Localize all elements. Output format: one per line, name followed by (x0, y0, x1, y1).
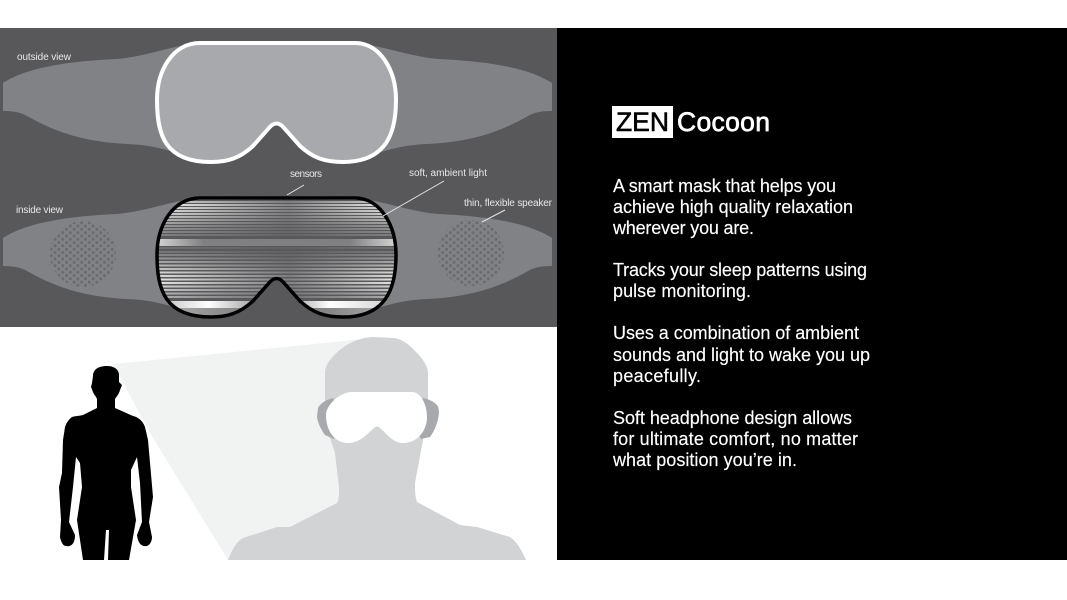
text block: intro: wherever you are. (612, 218, 754, 238)
leader line: speaker (482, 210, 505, 222)
text block: waking (613, 323, 870, 386)
inside mask strap (3, 200, 552, 310)
inside mask lens with sensor stripes (158, 200, 394, 316)
text block: intro (612, 176, 853, 238)
text block: waking: Uses a combination of ambient (613, 323, 859, 343)
right speaker (438, 220, 504, 286)
logo word: ZEN: ZEN (616, 107, 669, 137)
text block: tracking: Tracks your sleep patterns using (613, 260, 867, 280)
leader line: ambient light (383, 181, 444, 216)
left speaker (50, 221, 116, 287)
mask strap right (410, 398, 439, 439)
inside mask outline (157, 198, 396, 317)
text block: comfort: Soft headphone design allows (613, 408, 852, 428)
panel: description background (557, 28, 1067, 560)
text block: waking: sounds and light to wake you up (613, 345, 870, 365)
label: sensors: sensors (290, 169, 322, 180)
label: thin, flexible speaker: thin, flexible speaker (464, 198, 553, 209)
mask lens (326, 392, 427, 443)
text block: tracking (613, 260, 867, 301)
text block: comfort (612, 408, 858, 470)
outside mask lens (157, 43, 396, 162)
logo (612, 106, 770, 138)
sight beam (113, 337, 385, 560)
text block: comfort: what position you’re in. (612, 450, 797, 470)
outside mask strap (3, 45, 552, 155)
text block: intro: achieve high quality relaxation (613, 197, 853, 217)
logo box (612, 106, 673, 138)
icon: full body silhouette (59, 366, 153, 560)
logo word: Cocoon: Cocoon (677, 107, 770, 137)
leader line: sensors (287, 185, 304, 195)
text block: intro: A smart mask that helps you (613, 176, 836, 196)
mask strap left (317, 398, 345, 439)
text block: tracking: pulse monitoring. (613, 281, 751, 301)
inside view mask (3, 195, 552, 320)
text block: waking: peacefully. (613, 366, 701, 386)
icon: close-up head wearing mask (228, 337, 526, 560)
label: outside view: outside view (17, 52, 72, 63)
label: soft, ambient light: soft, ambient light (409, 168, 487, 179)
outside view mask (3, 43, 552, 162)
text block: comfort: for ultimate comfort, no matter (613, 429, 858, 449)
panel: mask diagram background (0, 28, 557, 327)
label: inside view: inside view (16, 205, 64, 216)
head and shoulders (228, 337, 526, 560)
